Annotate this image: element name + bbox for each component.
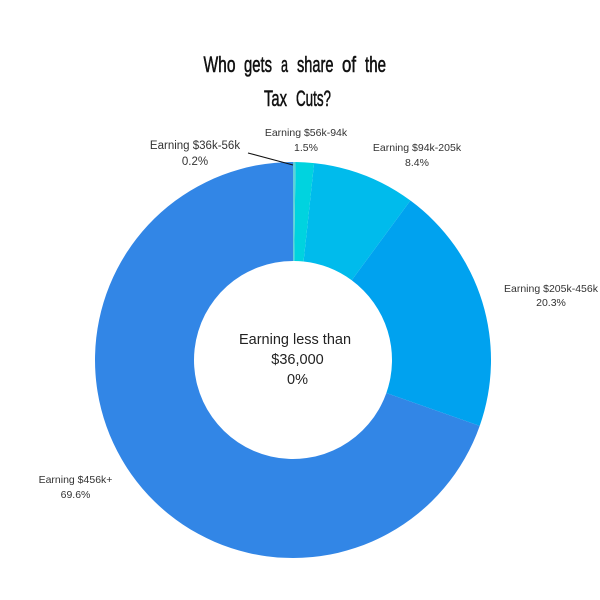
title: of bbox=[342, 52, 357, 77]
slice: earning $36k-56k bbox=[293, 162, 295, 261]
center label: earning less than $36,000: Earning less than bbox=[239, 332, 351, 348]
center label: earning less than $36,000 bbox=[239, 332, 351, 388]
label: earning $36k-56k bbox=[150, 140, 240, 168]
slice: earning $94k-205k bbox=[304, 163, 410, 280]
title: gets bbox=[244, 52, 272, 77]
center label: earning less than $36,000: 0% bbox=[287, 372, 308, 388]
label: earning $56k-94k bbox=[265, 127, 348, 154]
label: earning $456k+: Earning $456k+ bbox=[39, 474, 112, 486]
label: earning $205k-456k: Earning $205k-456k bbox=[504, 283, 599, 295]
label: earning $56k-94k: 1.5% bbox=[294, 142, 318, 154]
title: share bbox=[297, 52, 334, 77]
label: earning $56k-94k: Earning $56k-94k bbox=[265, 127, 348, 139]
label: earning $205k-456k bbox=[504, 283, 599, 309]
donut chart bbox=[95, 162, 491, 558]
label: earning $36k-56k: 0.2% bbox=[182, 156, 208, 168]
title: Tax bbox=[264, 86, 287, 111]
title bbox=[204, 52, 386, 111]
leader line bbox=[248, 153, 293, 165]
slice: earning $456k+ bbox=[95, 162, 480, 558]
label: earning $205k-456k: 20.3% bbox=[536, 297, 566, 309]
slice: earning $205k-456k bbox=[352, 201, 491, 426]
label: earning $94k-205k: Earning $94k-205k bbox=[373, 142, 462, 154]
label: earning $456k+: 69.6% bbox=[61, 489, 90, 501]
title: a bbox=[281, 52, 288, 77]
label: earning $456k+ bbox=[39, 474, 112, 501]
label: earning $94k-205k: 8.4% bbox=[405, 157, 429, 169]
title: Who bbox=[204, 52, 236, 77]
label: earning $36k-56k: Earning $36k-56k bbox=[150, 140, 240, 152]
slice: earning $56k-94k bbox=[294, 162, 314, 262]
title: Cuts? bbox=[296, 86, 331, 111]
label: earning $94k-205k bbox=[373, 142, 462, 169]
center label: earning less than $36,000: $36,000 bbox=[271, 352, 324, 368]
title: the bbox=[365, 52, 386, 77]
